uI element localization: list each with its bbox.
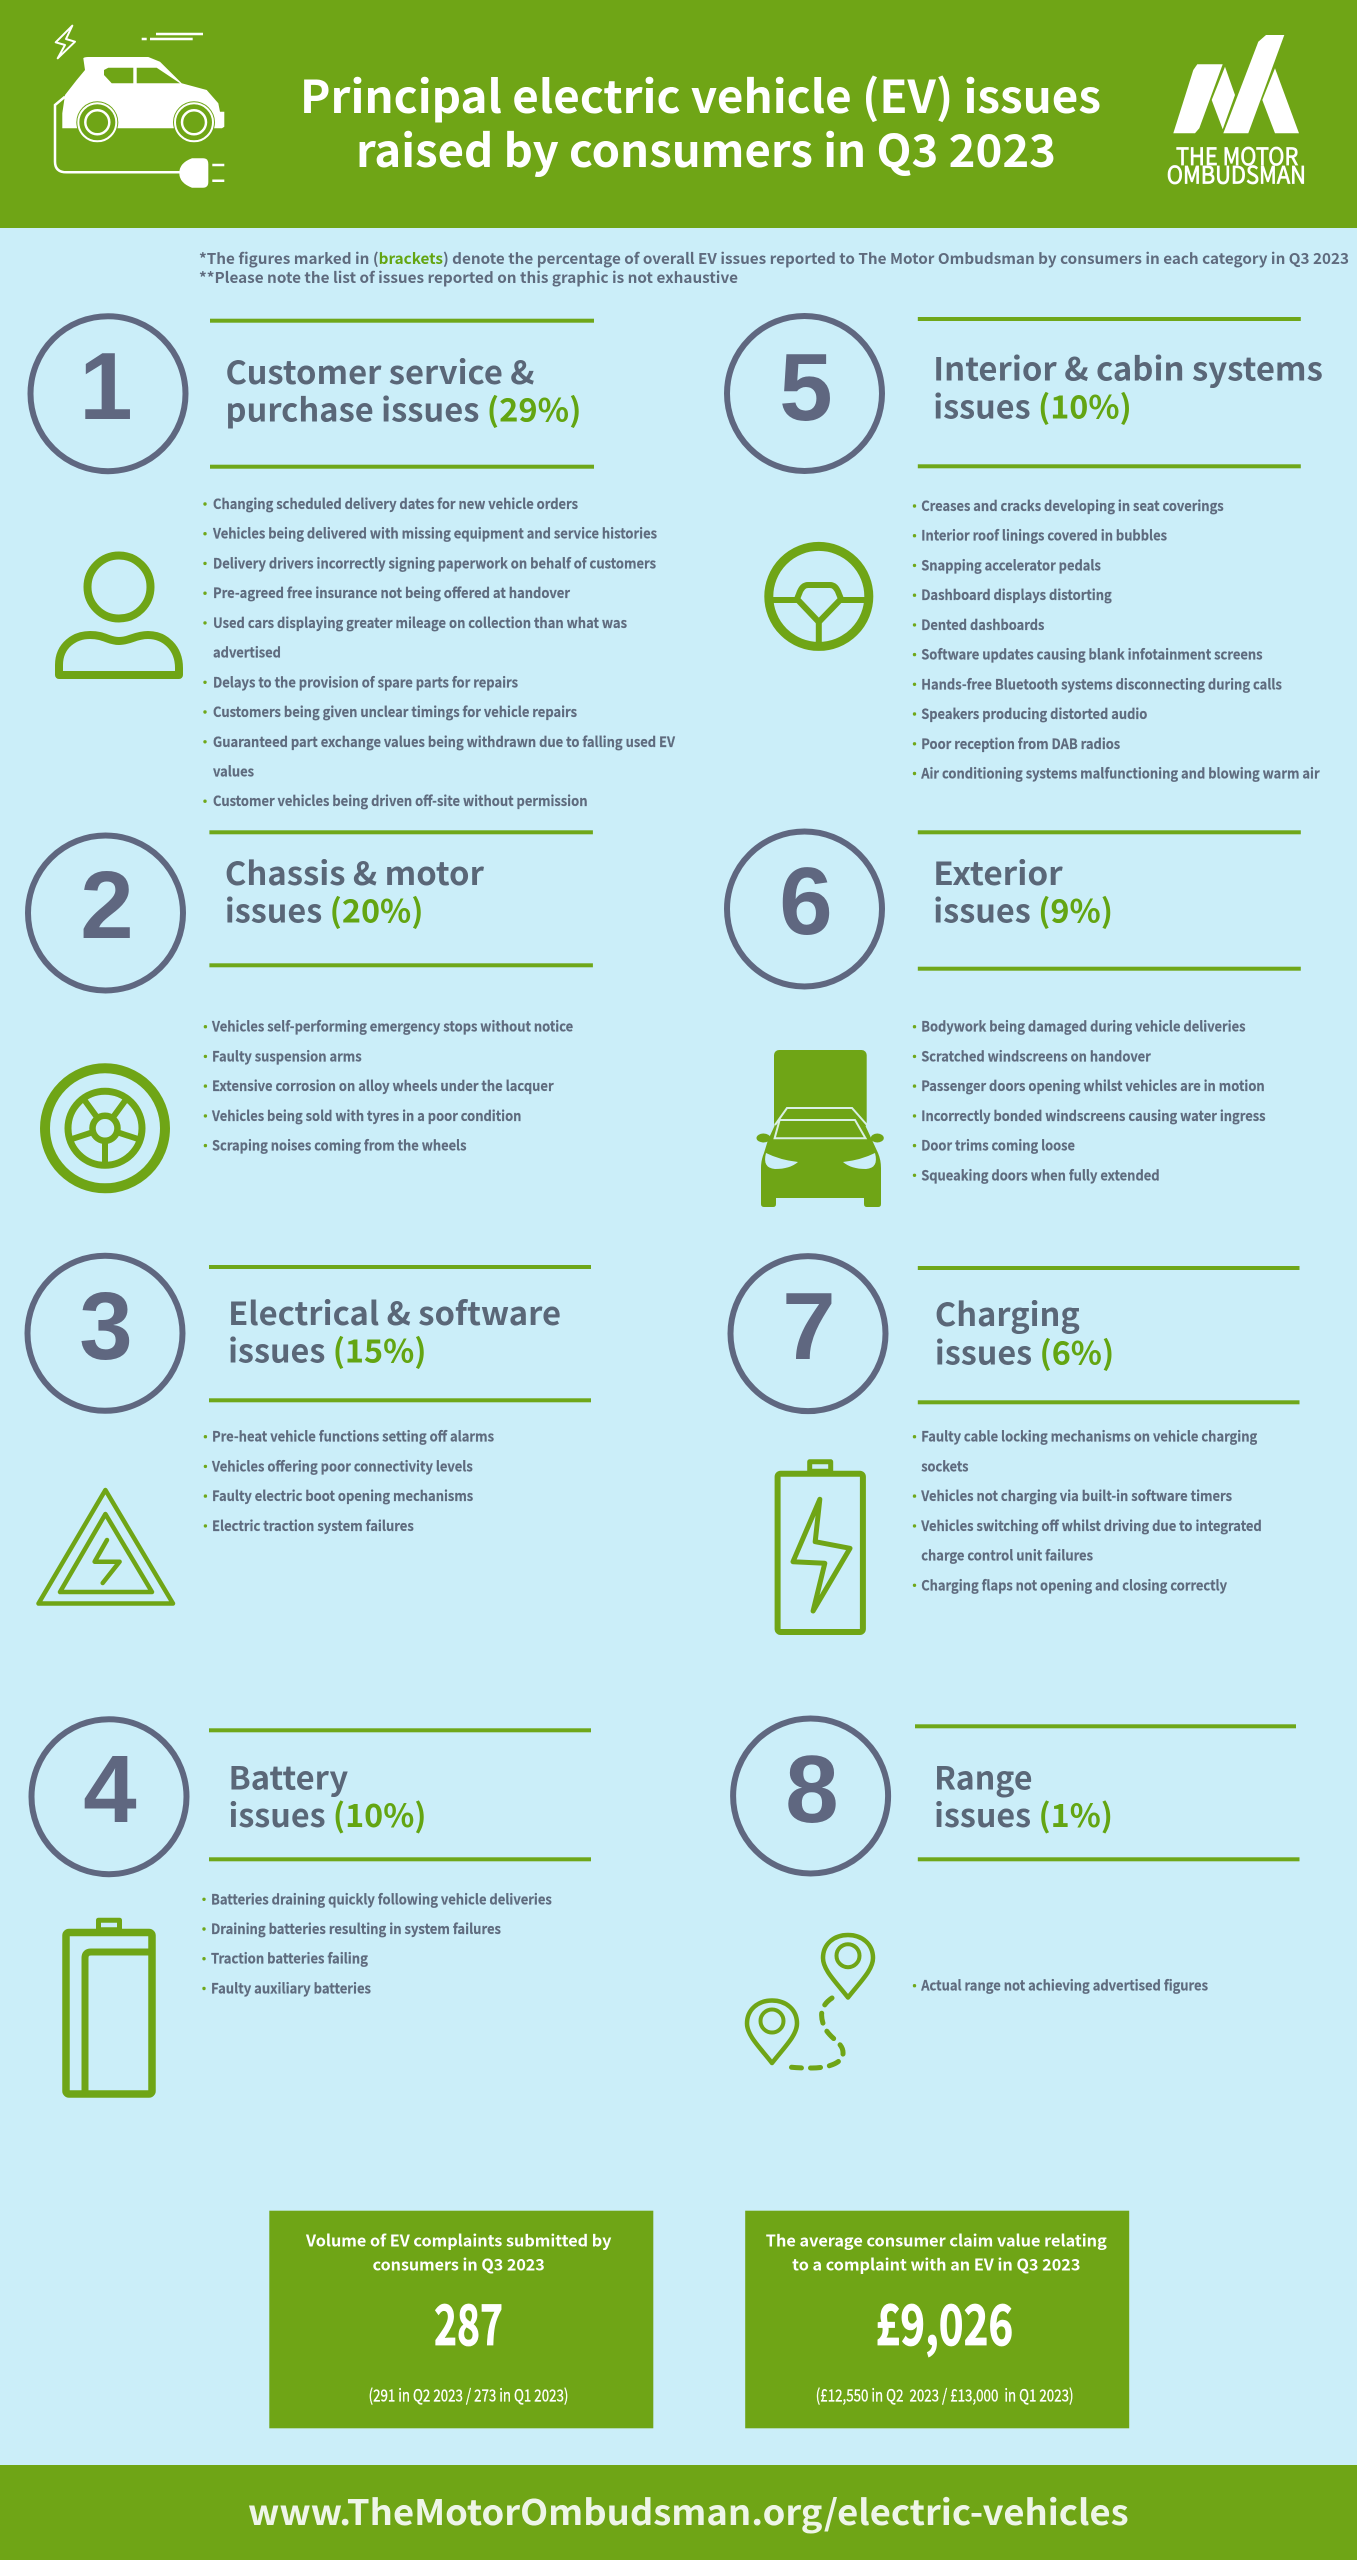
list 7: charge control unit failures (921, 1546, 1093, 1566)
icon: battery (66, 1920, 152, 2094)
list 3 (204, 1427, 494, 1536)
panel: 4 battery (32, 1719, 591, 2094)
list 6 (913, 1017, 1266, 1185)
number badge 3 (28, 1256, 182, 1411)
list 5: Air conditioning systems malfunctioning and blowing warm air (920, 764, 1320, 784)
list 2: Vehicles self-performing emergency stops without notice (211, 1017, 573, 1037)
footer banner (0, 2465, 1357, 2560)
number badge 6 (727, 832, 882, 986)
logo: The Motor Ombudsman: OMBUDSMAN (1167, 155, 1306, 190)
list 8: Actual range not achieving advertised figures (920, 1976, 1208, 1996)
list 6: Door trims coming loose (921, 1136, 1075, 1156)
heading 8: issues (1%) (934, 1791, 1113, 1837)
number badge 4: 4 (83, 1736, 137, 1843)
number badge 2: 2 (80, 852, 134, 959)
list 1: values (213, 762, 254, 782)
list 1: Changing scheduled delivery dates for new vehicle orders (213, 494, 578, 514)
list 3: Vehicles offering poor connectivity levels (211, 1456, 473, 1476)
list 2 (204, 1017, 573, 1156)
panel: 3 electrical and software (28, 1256, 591, 1604)
panel: 1 customer service (30, 316, 675, 811)
number badge 8 (733, 1718, 888, 1874)
stat box: volume of complaints: (291 in Q2 2023 / 273 in Q1 2023) (369, 2382, 568, 2407)
heading 4: issues (10%) (228, 1791, 426, 1837)
icon: wheel (45, 1068, 165, 1188)
logo: The Motor Ombudsman (1167, 35, 1306, 190)
icon: route pins (747, 1935, 873, 2068)
list 5: Hands-free Bluetooth systems disconnecting during calls (921, 674, 1282, 694)
list 5 (913, 496, 1320, 784)
stat box: volume of complaints: Volume of EV complaints submitted by (305, 2228, 611, 2252)
footnotes: *The figures marked in (brackets) denote the percentage of overall EV issues reported to The Motor Ombudsman by consumers in each category in Q3 2023 (199, 248, 1349, 269)
list 7: Vehicles not charging via built-in software timers (920, 1486, 1232, 1506)
heading 7 (918, 1266, 1300, 1404)
number badge 5: 5 (779, 334, 833, 441)
logo: The Motor Ombudsman: THE MOTOR (1176, 137, 1298, 172)
number badge 4 (32, 1719, 186, 1874)
list 5: Dented dashboards (921, 615, 1044, 635)
list 1: Used cars displaying greater mileage on collection than what was (213, 613, 627, 633)
list 1: Pre-agreed free insurance not being offered at handover (213, 583, 571, 603)
list 1: Delays to the provision of spare parts for repairs (213, 672, 518, 692)
stat box: average claim value: (£12,550 in Q2 2023 / £13,000 in Q1 2023) (816, 2382, 1074, 2407)
icon: car with bonnet open (756, 1050, 884, 1207)
number badge 6: 6 (779, 848, 833, 955)
footnotes (199, 248, 1349, 288)
heading 4 (209, 1728, 591, 1861)
list 7: Charging flaps not opening and closing correctly (921, 1575, 1227, 1595)
stat box: average claim value: £9,026 (876, 2281, 1013, 2362)
title: raised by consumers in Q3 2023 (356, 115, 1056, 180)
title: Principal electric vehicle (EV) issues (300, 61, 1101, 126)
panel: 5 interior and cabin (727, 316, 1323, 784)
heading 6: issues (9%) (933, 887, 1113, 933)
heading 3 (209, 1265, 591, 1402)
icon: steering wheel (769, 546, 869, 646)
heading 8: Range (934, 1753, 1032, 1799)
footer banner: www.TheMotorOmbudsman.org/electric-vehicles (248, 2485, 1129, 2536)
list 3: Electric traction system failures (212, 1516, 414, 1536)
list 5: Creases and cracks developing in seat coverings (921, 496, 1224, 516)
list 2: Extensive corrosion on alloy wheels under the lacquer (212, 1076, 554, 1096)
number badge 7 (730, 1256, 886, 1411)
icon: high voltage triangle (38, 1490, 173, 1604)
heading 7: Charging (935, 1290, 1080, 1336)
stat box: volume of complaints: 287 (434, 2281, 503, 2362)
number badge 2 (28, 836, 183, 990)
panel: 6 exterior (727, 830, 1301, 1207)
list 6: Passenger doors opening whilst vehicles are in motion (921, 1076, 1265, 1096)
stat box: volume of complaints: consumers in Q3 2023 (373, 2251, 545, 2275)
list 6: Scratched windscreens on handover (921, 1046, 1152, 1066)
list 7 (913, 1427, 1262, 1595)
list 2: Vehicles being sold with tyres in a poor condition (211, 1106, 521, 1126)
list 1: Guaranteed part exchange values being withdrawn due to falling used EV (213, 732, 675, 752)
number badge 8: 8 (785, 1736, 839, 1843)
list 4: Draining batteries resulting in system failures (211, 1919, 501, 1939)
heading 1: purchase issues (29%) (226, 386, 582, 432)
list 5: Dashboard displays distorting (921, 585, 1112, 605)
heading 2 (209, 830, 593, 967)
list 1 (203, 494, 675, 811)
header banner (0, 0, 1357, 228)
list 4 (202, 1889, 552, 1998)
list 3: Pre-heat vehicle functions setting off alarms (212, 1427, 494, 1447)
list 5: Software updates causing blank infotainment screens (921, 645, 1263, 665)
list 4: Faulty auxiliary batteries (211, 1978, 371, 1998)
stat box: volume of complaints (269, 2211, 653, 2428)
heading 3: issues (15%) (228, 1327, 426, 1373)
icon: electric car with charging plug (55, 26, 224, 188)
list 7: Vehicles switching off whilst driving due to integrated (920, 1516, 1262, 1536)
stat box: average claim value (745, 2211, 1129, 2428)
number badge 3: 3 (79, 1273, 133, 1380)
list 4: Traction batteries failing (211, 1949, 368, 1969)
number badge 1: 1 (79, 333, 133, 440)
panel: 7 charging (730, 1256, 1300, 1632)
list 1: Delivery drivers incorrectly signing paperwork on behalf of customers (213, 553, 656, 573)
heading 2: issues (20%) (225, 887, 424, 933)
list 1: advertised (213, 643, 281, 663)
list 1: Customer vehicles being driven off-site without permission (213, 791, 588, 811)
list 2: Scraping noises coming from the wheels (212, 1136, 467, 1156)
heading 1 (210, 319, 594, 469)
heading 2: Chassis & motor (225, 849, 484, 895)
heading 6 (918, 830, 1301, 971)
heading 5 (918, 317, 1323, 468)
title (300, 61, 1101, 180)
list 1: Customers being given unclear timings for vehicle repairs (213, 702, 577, 722)
heading 4: Battery (228, 1753, 348, 1799)
footnotes: **Please note the list of issues reported on this graphic is not exhaustive (199, 267, 738, 288)
heading 8 (915, 1724, 1300, 1861)
panel: 8 range (733, 1718, 1300, 2068)
list 5: Speakers producing distorted audio (921, 704, 1148, 724)
heading 5: issues (10%) (933, 382, 1132, 428)
heading 7: issues (6%) (935, 1328, 1114, 1374)
list 7: Faulty cable locking mechanisms on vehicle charging (921, 1427, 1258, 1447)
heading 6: Exterior (933, 849, 1063, 895)
icon: person (59, 556, 179, 675)
list 1: Vehicles being delivered with missing equipment and service histories (212, 524, 657, 544)
list 5: Poor reception from DAB radios (921, 734, 1120, 754)
panel: 2 chassis and motor (28, 830, 593, 1188)
number badge 5 (727, 316, 882, 471)
stat box: average claim value: The average consumer claim value relating (766, 2228, 1107, 2252)
heading 5: Interior & cabin systems (933, 344, 1323, 390)
list 5: Snapping accelerator pedals (921, 555, 1101, 575)
heading 3: Electrical & software (228, 1289, 561, 1335)
number badge 7: 7 (782, 1273, 836, 1380)
icon: battery with lightning bolt (778, 1462, 863, 1632)
list 6: Bodywork being damaged during vehicle deliveries (921, 1017, 1246, 1037)
list 6: Squeaking doors when fully extended (921, 1165, 1160, 1185)
heading 1: Customer service & (226, 348, 534, 394)
number badge 1 (30, 316, 186, 471)
list 6: Incorrectly bonded windscreens causing water ingress (921, 1106, 1266, 1126)
stat box: average claim value: to a complaint with an EV in Q3 2023 (792, 2251, 1080, 2275)
list 5: Interior roof linings covered in bubbles (921, 526, 1167, 546)
list 3: Faulty electric boot opening mechanisms (212, 1486, 473, 1506)
list 2: Faulty suspension arms (212, 1046, 362, 1066)
list 4: Batteries draining quickly following vehicle deliveries (211, 1889, 552, 1909)
list 7: sockets (921, 1456, 969, 1476)
